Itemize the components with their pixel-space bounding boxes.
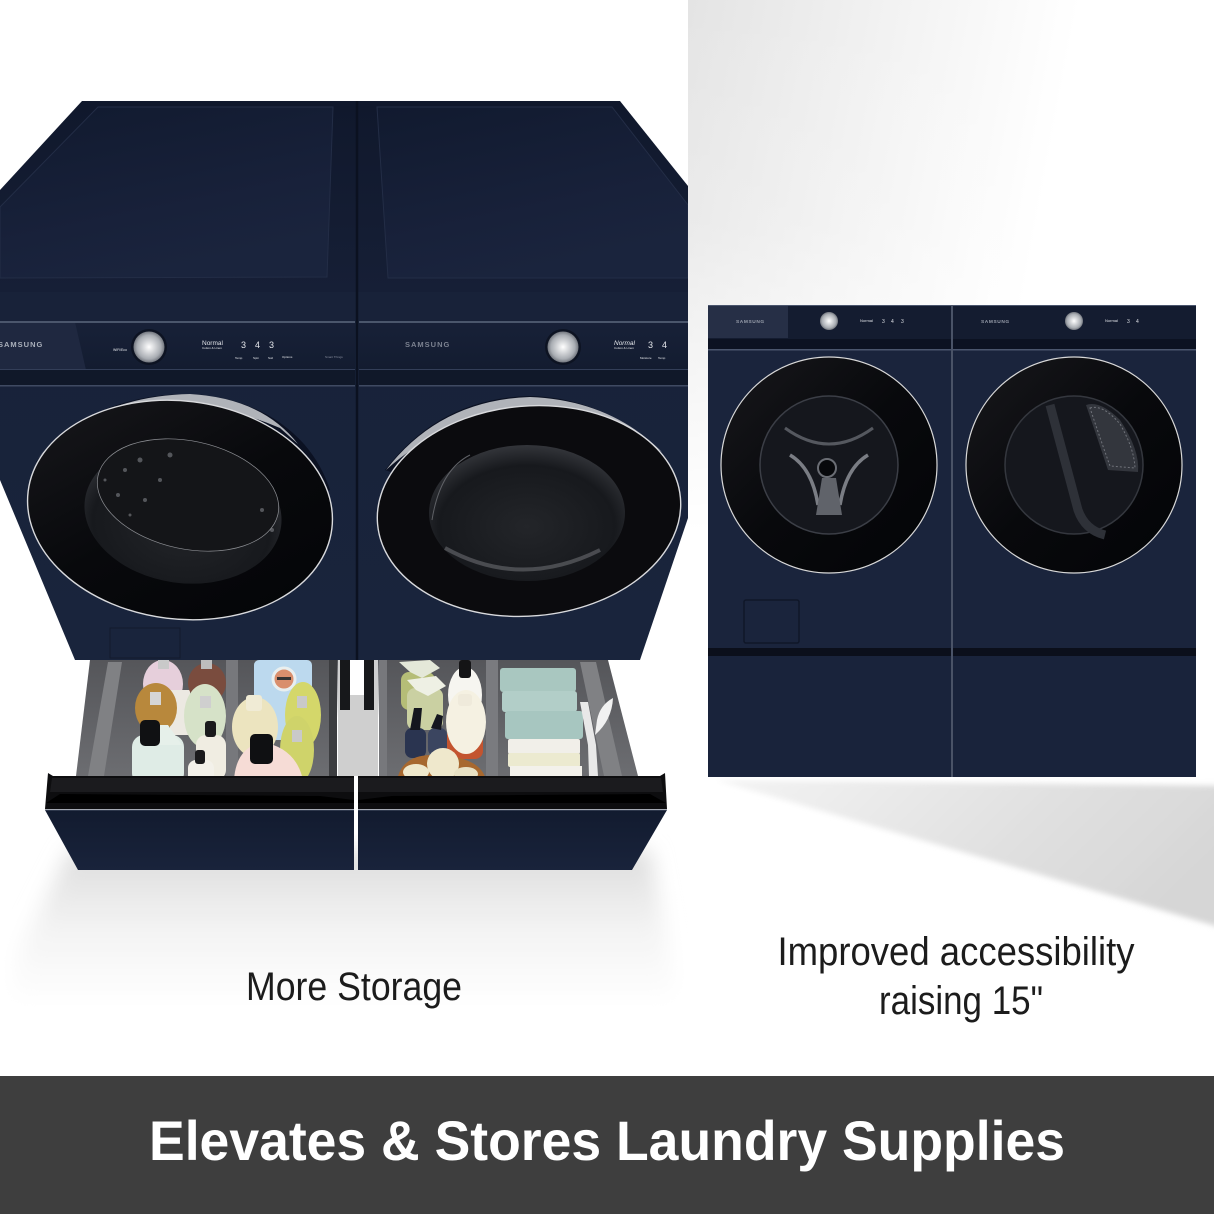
right drawer front <box>358 773 667 870</box>
panel: left floor shadow <box>36 843 661 952</box>
label: washer display: Spin <box>253 356 259 360</box>
label: display: 4 <box>1136 319 1139 325</box>
caption: improved accessibility: raising 15" <box>879 979 1043 1023</box>
label: washer display: Smart Things <box>325 355 343 359</box>
title bar <box>0 1076 1214 1214</box>
label: Samsung logo: SAMSUNG <box>736 319 765 325</box>
label: dryer display <box>614 340 667 360</box>
drawer hinges <box>340 660 374 710</box>
label: washer display: WiFi/Eco <box>113 348 127 352</box>
drum <box>760 396 898 534</box>
label: washer display: 3 <box>241 340 246 350</box>
label: washer display: 3 <box>269 340 274 350</box>
pedestals <box>708 305 1196 777</box>
label: washer display: Normal <box>202 340 224 347</box>
label: dryer display: Temp <box>658 356 666 360</box>
label: washer display: Cotton & Linen <box>202 346 222 350</box>
dryer body <box>358 292 688 660</box>
door <box>721 357 937 573</box>
label: dryer display: 3 <box>648 340 653 350</box>
laundry supplies right drawer <box>397 660 613 781</box>
panel: right wall background <box>688 0 1214 1076</box>
label: washer display: Options <box>282 355 293 359</box>
dryer door <box>376 396 682 618</box>
dryer dial <box>545 329 581 365</box>
washer control panel <box>0 320 355 386</box>
washer lower recess <box>110 628 180 658</box>
label: display: 3 <box>1127 319 1130 325</box>
panel: washer and dryer close-up with storage drawers <box>0 101 690 870</box>
label: display <box>1105 318 1139 325</box>
label: display <box>860 318 904 325</box>
label: washer display: Soil <box>268 356 273 360</box>
white tool rack <box>580 702 598 776</box>
dryer glass <box>429 445 625 581</box>
storage box <box>254 660 312 740</box>
washer top surface <box>0 101 356 309</box>
caption: improved accessibility: Improved accessibility <box>778 930 1134 974</box>
label: washer display <box>113 340 343 360</box>
label: dryer display: Cotton & Linen <box>614 346 634 350</box>
dryer control panel <box>359 320 688 386</box>
label: display: 4 <box>891 319 894 325</box>
title: Elevates & Stores Laundry Supplies <box>149 1109 1065 1172</box>
label: washer display: 4 <box>255 340 260 350</box>
label: dryer display: Normal <box>614 340 636 347</box>
panel: front view washer and dryer on pedestals <box>708 305 1196 777</box>
small washer <box>708 305 951 648</box>
dial <box>820 312 838 330</box>
washer door <box>26 394 334 620</box>
door <box>966 357 1182 573</box>
dark dispensers <box>405 728 426 758</box>
label: display: Normal <box>860 318 873 323</box>
washer body <box>0 292 356 660</box>
spray bottles <box>401 672 435 710</box>
dryer top surface <box>358 101 688 309</box>
caption: improved accessibility <box>778 930 1134 1023</box>
dial <box>1065 312 1083 330</box>
label: Samsung logo: SAMSUNG <box>981 319 1010 325</box>
washer glass <box>84 438 282 584</box>
basket with dryer balls <box>398 755 485 776</box>
label: display: 3 <box>901 319 904 325</box>
label: dryer display: Moisture <box>640 356 652 360</box>
small dryer <box>953 305 1196 648</box>
detergent panel outline <box>744 600 799 643</box>
white bottle and jug <box>448 668 482 705</box>
label: display: 3 <box>882 319 885 325</box>
laundry supplies left drawer <box>132 660 321 785</box>
caption: More Storage: More Storage <box>246 965 462 1009</box>
storage drawers interior <box>76 660 638 785</box>
label: dryer display: 4 <box>662 340 667 350</box>
bottles <box>143 660 183 690</box>
label: display: Normal <box>1105 318 1118 323</box>
drum <box>1005 396 1143 535</box>
label: Samsung logo: SAMSUNG <box>405 340 450 349</box>
label: washer display: Temp <box>235 356 243 360</box>
left drawer front <box>45 773 354 870</box>
washer dial <box>131 329 167 365</box>
towels <box>500 668 583 778</box>
